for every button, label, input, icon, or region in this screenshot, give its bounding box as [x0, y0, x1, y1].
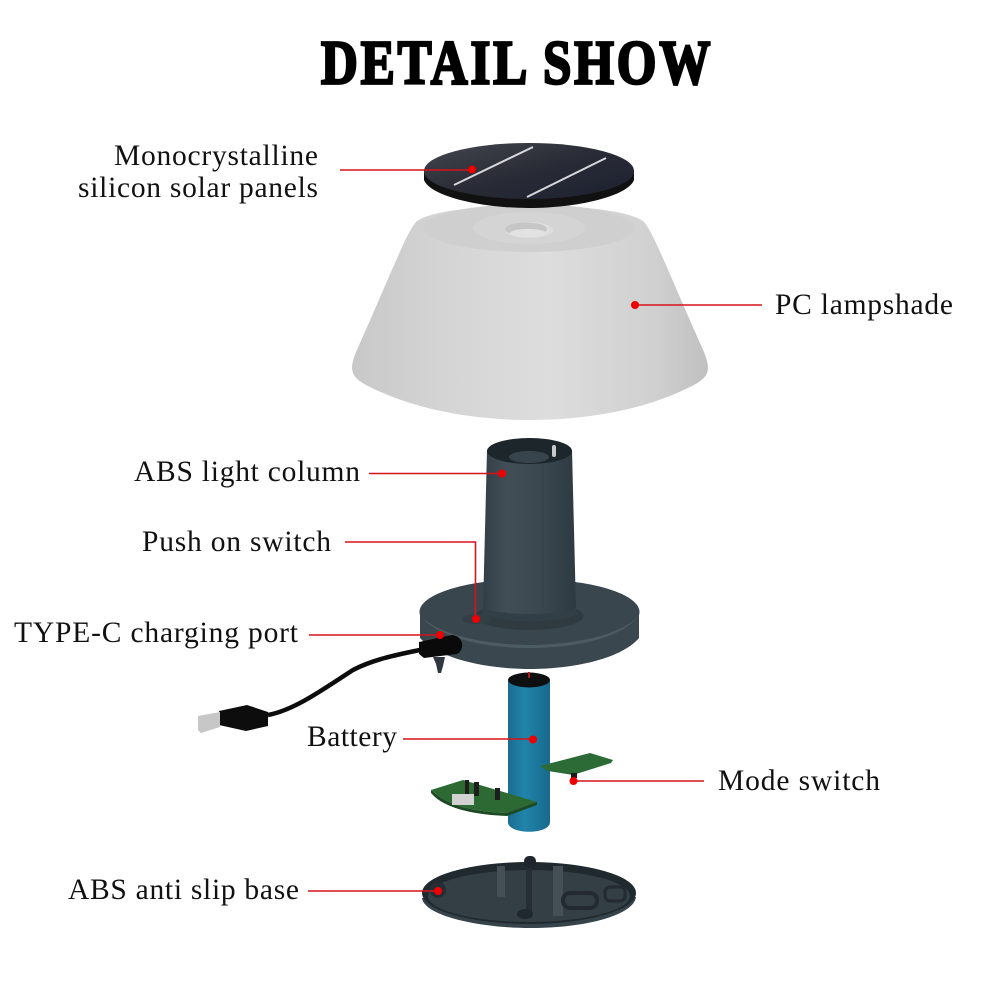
icon: ABS light column: [482, 438, 577, 622]
callout line: Push on switch: [345, 542, 480, 623]
icon: PC lampshade: [352, 204, 708, 420]
label: PC lampshade: PC lampshade: [775, 289, 953, 321]
icon: battery: [508, 672, 550, 832]
label: solar panels: [78, 140, 318, 204]
label: solar panels: silicon solar panels: [78, 172, 318, 204]
title: DETAIL SHOW: [321, 29, 713, 98]
icon: circuit boards: [431, 753, 613, 816]
icon: round base with switch: [420, 579, 640, 669]
label: solar panels: Monocrystalline: [114, 140, 318, 172]
label: ABS anti slip base: ABS anti slip base: [68, 874, 299, 906]
callout line: solar panels: [340, 166, 476, 174]
icon: anti slip base: [422, 856, 636, 928]
callout line: PC lampshade: [631, 301, 762, 309]
label: TYPE-C charging port: TYPE-C charging port: [14, 617, 299, 649]
icon: solar panel: [424, 143, 634, 208]
label: Battery: Battery: [307, 721, 397, 753]
label: Mode switch: Mode switch: [718, 765, 880, 797]
callout line: ABS light column: [369, 470, 506, 478]
callout line: ABS anti slip base: [308, 887, 442, 895]
callout line: Mode switch: [570, 777, 704, 785]
callout line: Battery: [403, 672, 537, 744]
label: Push on switch: Push on switch: [142, 526, 331, 558]
label: ABS light column: ABS light column: [134, 456, 360, 488]
callout line: TYPE-C charging port: [309, 631, 444, 639]
icon: USB cable: [198, 635, 462, 733]
